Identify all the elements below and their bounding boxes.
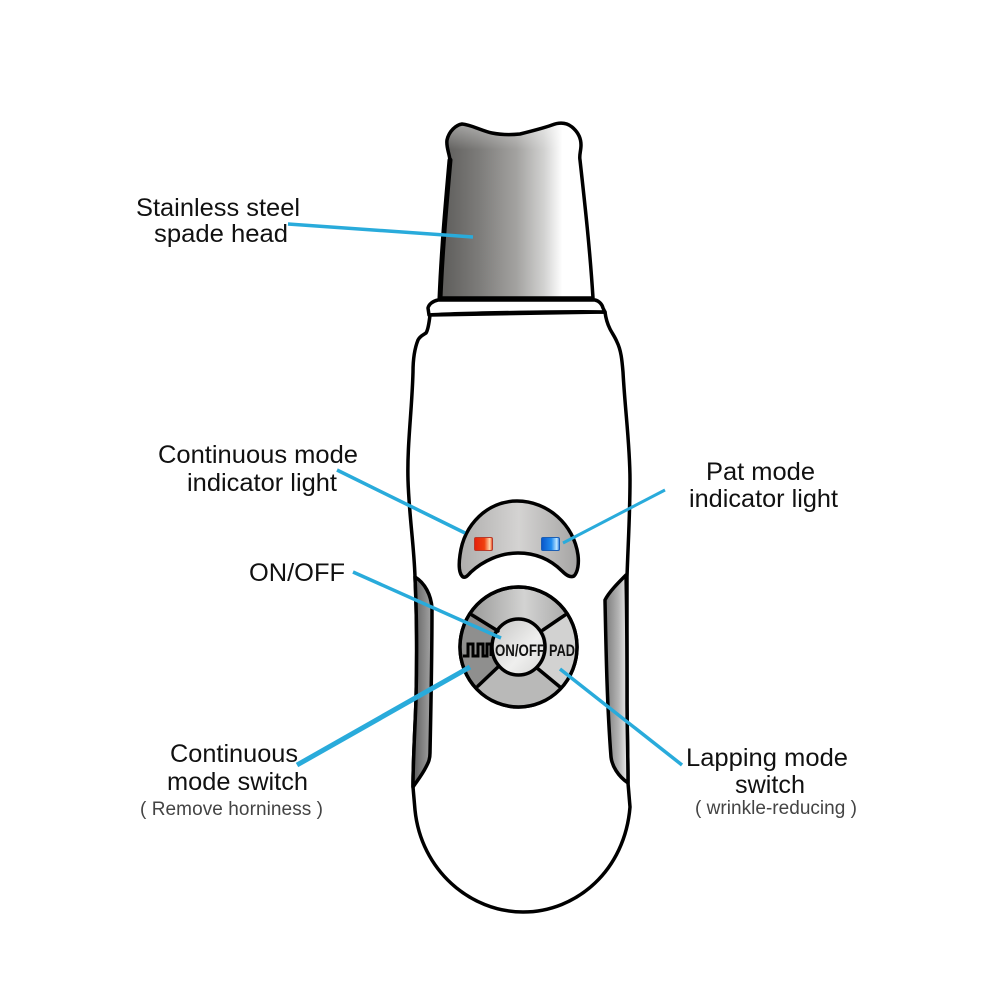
label: ON/OFF: ON/OFF [249,559,345,587]
red indicator light [474,538,492,550]
leader: continuous mode indicator light [337,470,465,533]
divider lines [472,615,565,687]
leader: ON/OFF [353,572,501,638]
blue indicator light [542,538,560,550]
label: stainless steel spade head: Stainless steel [136,194,300,222]
label: continuous mode indicator light [158,441,358,497]
button outline [460,587,577,707]
label: continuous mode switch: ( Remove horniness ) [140,799,323,820]
label: pat mode indicator light: Pat mode [706,458,815,486]
right side panel [605,575,628,783]
label: lapping mode switch [686,744,857,819]
label: lapping mode switch: ( wrinkle-reducing ) [695,798,857,819]
button: bottom segment [477,667,560,707]
button ring [460,587,577,707]
leader lines [288,224,682,765]
icon: square wave [463,644,491,656]
device illustration [408,123,630,912]
label: pat mode indicator light [689,458,838,513]
leader: continuous mode switch [297,667,470,765]
button: right segment [537,612,576,689]
button: left segment [461,612,498,689]
label: lapping mode switch: Lapping mode [686,744,848,772]
label: lapping mode switch: switch [735,771,805,799]
body outline [408,312,630,912]
label: continuous mode indicator light: Continuous mode [158,441,358,469]
button label: ON/OFF: ON/OFF [495,641,545,660]
center on/off button [492,619,545,675]
label: continuous mode switch [140,740,323,820]
label: continuous mode indicator light: indicator light [187,469,337,497]
leader: pat mode indicator light [563,490,665,543]
label: stainless steel spade head [136,194,300,248]
stainless steel spade head [440,123,593,298]
control button pad [460,587,577,707]
leader: lapping mode switch [560,669,682,765]
label: stainless steel spade head: spade head [154,220,288,248]
label: continuous mode switch: mode switch [167,768,308,796]
collar [428,300,605,315]
indicator light crescent panel [459,501,578,577]
button label: PAD: PAD [549,641,575,660]
leader: stainless steel spade head [288,224,473,237]
left side panel [413,577,432,787]
label: pat mode indicator light: indicator light [689,485,838,513]
label: continuous mode switch: Continuous [170,740,298,768]
